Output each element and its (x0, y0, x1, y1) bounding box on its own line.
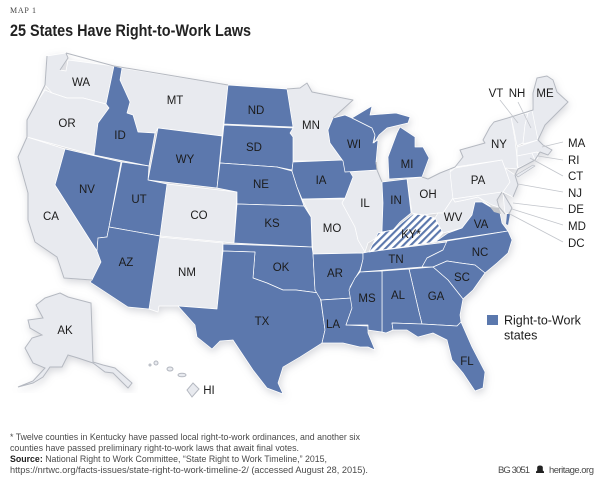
state: Missouri (302, 199, 365, 259)
state labels: UT (131, 194, 147, 206)
credit (498, 465, 594, 476)
title: 25 States Have Right-to-Work Laws (10, 21, 251, 40)
state labels: GA (428, 291, 445, 303)
legend label: Right-to-Work (504, 314, 582, 328)
state labels: OR (58, 118, 76, 130)
state: Washington (45, 53, 114, 104)
state labels: DC (568, 238, 585, 250)
legend swatch (487, 315, 498, 325)
state: Colorado (160, 184, 237, 243)
state labels: TN (388, 254, 404, 266)
state: Montana (120, 68, 228, 136)
state labels: MO (323, 223, 341, 235)
state labels: MS (358, 293, 376, 305)
state: Minnesota (287, 83, 353, 161)
state labels: NE (253, 179, 269, 191)
coastline outlines (18, 53, 568, 280)
state labels: KS (264, 218, 280, 230)
state: Illinois (342, 170, 383, 252)
state: Wisconsin (328, 115, 378, 172)
state: Maryland (453, 192, 502, 207)
state labels: ND (248, 105, 264, 117)
state labels: NH (509, 88, 525, 100)
state: Michigan lower peninsula (388, 127, 429, 179)
Long Island (516, 165, 535, 177)
state: Ohio (407, 168, 453, 215)
state labels: NV (79, 184, 95, 196)
state: Kansas (234, 204, 312, 247)
state labels: NM (178, 267, 196, 279)
state labels: MN (302, 120, 320, 132)
footnote and source: * Twelve counties in Kentucky have passed local right-to-work ordinances, and another six (10, 432, 360, 443)
state: Arizona (90, 227, 160, 309)
kicker: map number: MAP 1 (10, 6, 36, 15)
Virginia eastern shore (506, 214, 510, 225)
state labels: WA (72, 77, 90, 89)
state: North Carolina (422, 231, 512, 273)
state labels (43, 77, 586, 397)
state: Indiana (382, 179, 411, 232)
state labels: IN (390, 195, 402, 207)
state labels: MI (401, 159, 413, 171)
state labels: AK (57, 325, 73, 337)
state: Vermont (511, 113, 528, 146)
legend label: states (504, 328, 537, 342)
state: Idaho (94, 66, 155, 166)
state labels: OK (273, 262, 290, 274)
state: Arkansas (313, 253, 363, 300)
state: Louisiana (321, 298, 375, 350)
state: Texas (178, 251, 325, 394)
Chesapeake shading (490, 207, 501, 214)
state labels: HI (203, 385, 215, 397)
legend (487, 314, 582, 342)
credit: BG 3051 (498, 465, 530, 476)
state: Nevada (55, 149, 121, 251)
state labels: MA (568, 138, 586, 150)
footnote and source: https://nrtwc.org/facts-issues/state-right-to-work-timeline-2/ (accessed August 28, 2015). (10, 465, 368, 476)
state: Pennsylvania (450, 160, 510, 199)
state labels: NJ (568, 188, 582, 200)
state labels: SC (454, 272, 470, 284)
state: New Hampshire (523, 110, 538, 144)
state labels: ID (114, 130, 126, 142)
state: California (18, 137, 101, 280)
credit: heritage.org (549, 465, 594, 476)
state: Oklahoma (223, 244, 319, 293)
state labels: VT (489, 88, 503, 100)
state: Connecticut (517, 153, 535, 168)
footnote and source: Source: National Right to Work Committee, “State Right to Work Timeline,” 2015, (10, 454, 327, 465)
state: Mississippi (346, 271, 382, 332)
state labels: LA (326, 319, 340, 331)
state: Florida (392, 322, 485, 391)
state: Wyoming (148, 128, 222, 188)
state: Rhode Island (532, 152, 538, 160)
state labels: MT (167, 95, 183, 107)
state: New Mexico (149, 237, 223, 312)
leader lines (500, 100, 563, 242)
state labels: AR (327, 268, 343, 280)
state labels: OH (419, 189, 437, 201)
state: Iowa (292, 160, 353, 199)
state: South Dakota (220, 125, 293, 170)
state labels: ME (536, 88, 554, 100)
state labels: PA (471, 175, 486, 187)
state: North Dakota (224, 85, 293, 127)
state labels: AZ (119, 257, 133, 269)
state labels: WI (347, 139, 361, 151)
state: Michigan upper peninsula (352, 106, 410, 143)
state labels: AL (391, 290, 406, 302)
state labels: TX (255, 316, 270, 328)
state: Alabama (382, 269, 422, 333)
state labels: FL (460, 356, 474, 368)
state labels: MD (568, 221, 586, 233)
state: Utah (109, 162, 167, 236)
state labels: SD (246, 142, 262, 154)
state labels: IL (360, 198, 370, 210)
state: Delaware and Delmarva (503, 193, 512, 214)
state labels: IA (316, 175, 327, 187)
state labels: VA (474, 219, 489, 231)
state: Massachusetts (517, 140, 552, 156)
map: United States (18, 53, 568, 394)
footnote and source: counties have passed preliminary right-to-work laws that await final votes. (10, 443, 299, 454)
state: Maine (532, 76, 568, 140)
state labels: DE (568, 204, 584, 216)
state labels: RI (568, 155, 580, 167)
state: Oregon (27, 90, 109, 155)
state: Tennessee (360, 242, 447, 272)
state: Virginia (435, 202, 508, 242)
footnote and source (10, 432, 368, 476)
state: South Carolina (433, 261, 485, 299)
state labels: KY* (401, 229, 421, 241)
state: Georgia (409, 267, 463, 326)
state: Hawaii (149, 361, 199, 397)
state: Kentucky (hatched) (369, 214, 443, 252)
state labels: NY (491, 139, 507, 151)
state labels: CA (43, 211, 59, 223)
state labels: NC (472, 247, 488, 259)
state labels: CT (568, 171, 583, 183)
state labels: CO (190, 210, 208, 222)
state labels: WV (444, 212, 463, 224)
state: West Virginia (435, 197, 490, 233)
icon: liberty bell (536, 466, 544, 473)
state: New Jersey (503, 168, 518, 197)
state labels: WY (176, 154, 195, 166)
state: Alaska (18, 293, 132, 388)
state: New York (455, 117, 518, 169)
state: Nebraska (217, 163, 304, 206)
